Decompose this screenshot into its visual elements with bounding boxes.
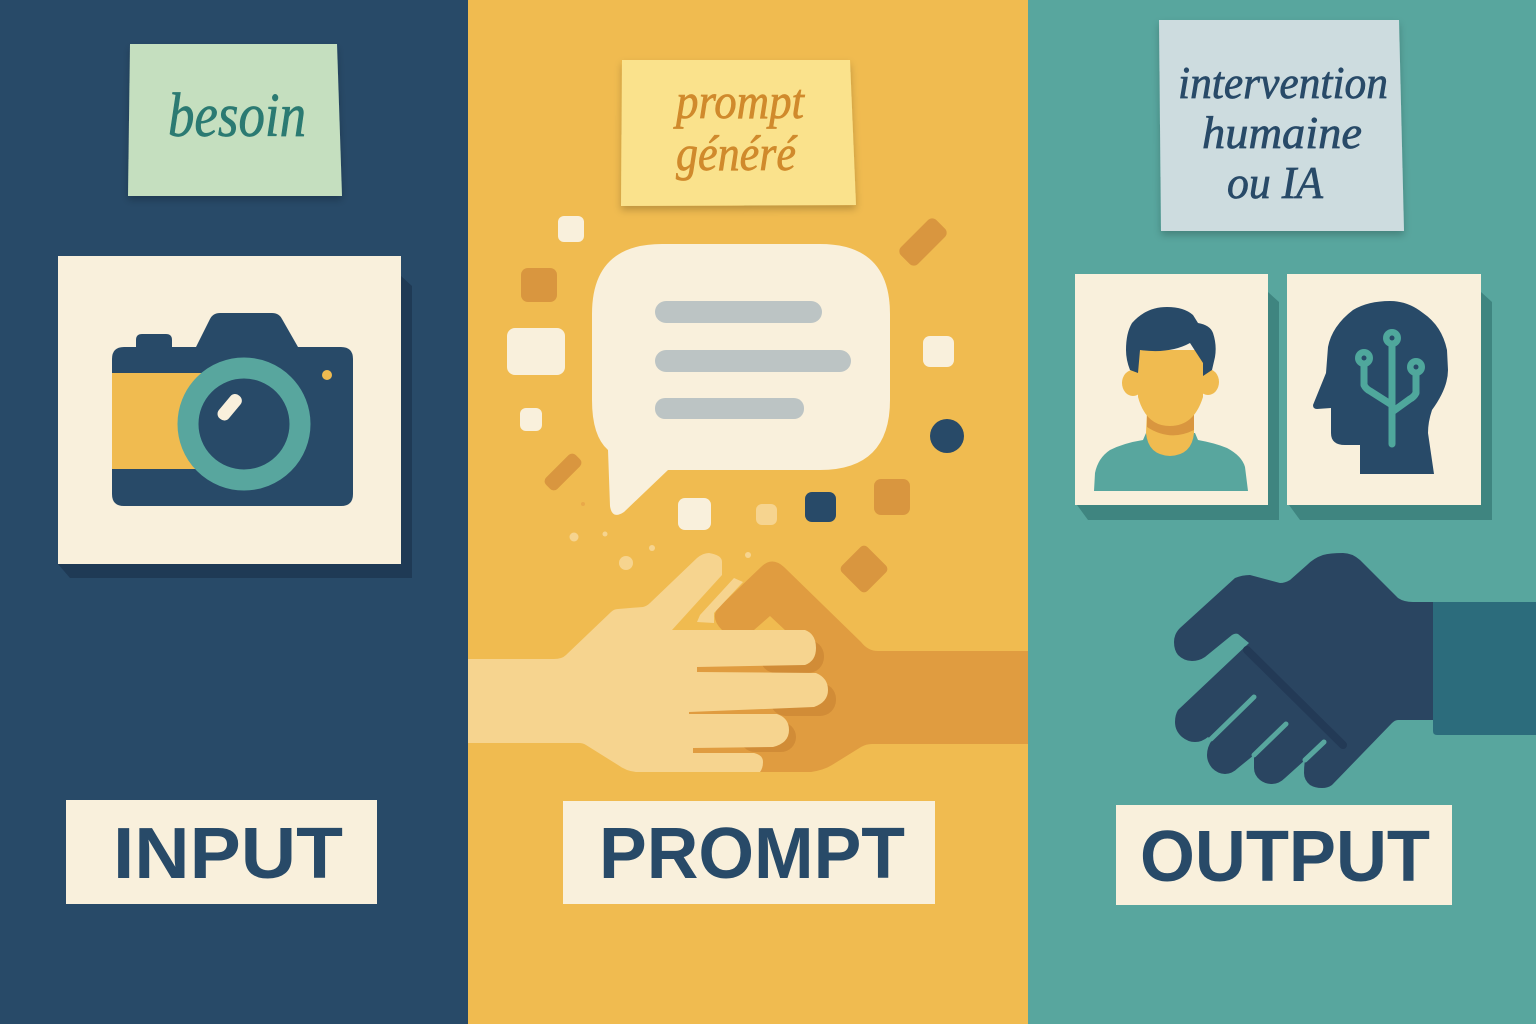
icon: person [1094, 307, 1248, 491]
icon: AI head [1313, 301, 1448, 474]
icon: camera [112, 313, 353, 506]
panel: input [0, 0, 468, 1024]
label: INPUT: INPUT [113, 814, 343, 894]
label: OUTPUT: OUTPUT [1140, 817, 1430, 897]
sticky note: intervention humaine ou IA [1159, 20, 1404, 231]
sticky note: intervention humaine ou IA: humaine [1202, 107, 1362, 158]
floating particles [507, 216, 964, 594]
icon: handshake [468, 553, 1028, 772]
panel: prompt [468, 0, 1028, 1024]
card: human [1075, 274, 1279, 520]
icon: speech bubble [592, 244, 890, 515]
label: INPUT [66, 800, 377, 904]
panel: output [1028, 0, 1536, 1024]
camera card [58, 256, 412, 578]
card: AI [1287, 274, 1492, 520]
sticky note: intervention humaine ou IA: ou IA [1227, 157, 1324, 208]
label: PROMPT: PROMPT [599, 814, 905, 894]
icon: navy handshake [1174, 553, 1536, 788]
sticky note: besoin [128, 44, 342, 196]
sticky note: intervention humaine ou IA: intervention [1178, 57, 1388, 108]
sticky note: prompt généré: prompt [673, 73, 805, 129]
sticky note: besoin: besoin [168, 82, 306, 150]
sticky note: prompt généré [621, 60, 856, 206]
sticky note: prompt généré: généré [676, 125, 798, 181]
label: PROMPT [563, 801, 935, 904]
